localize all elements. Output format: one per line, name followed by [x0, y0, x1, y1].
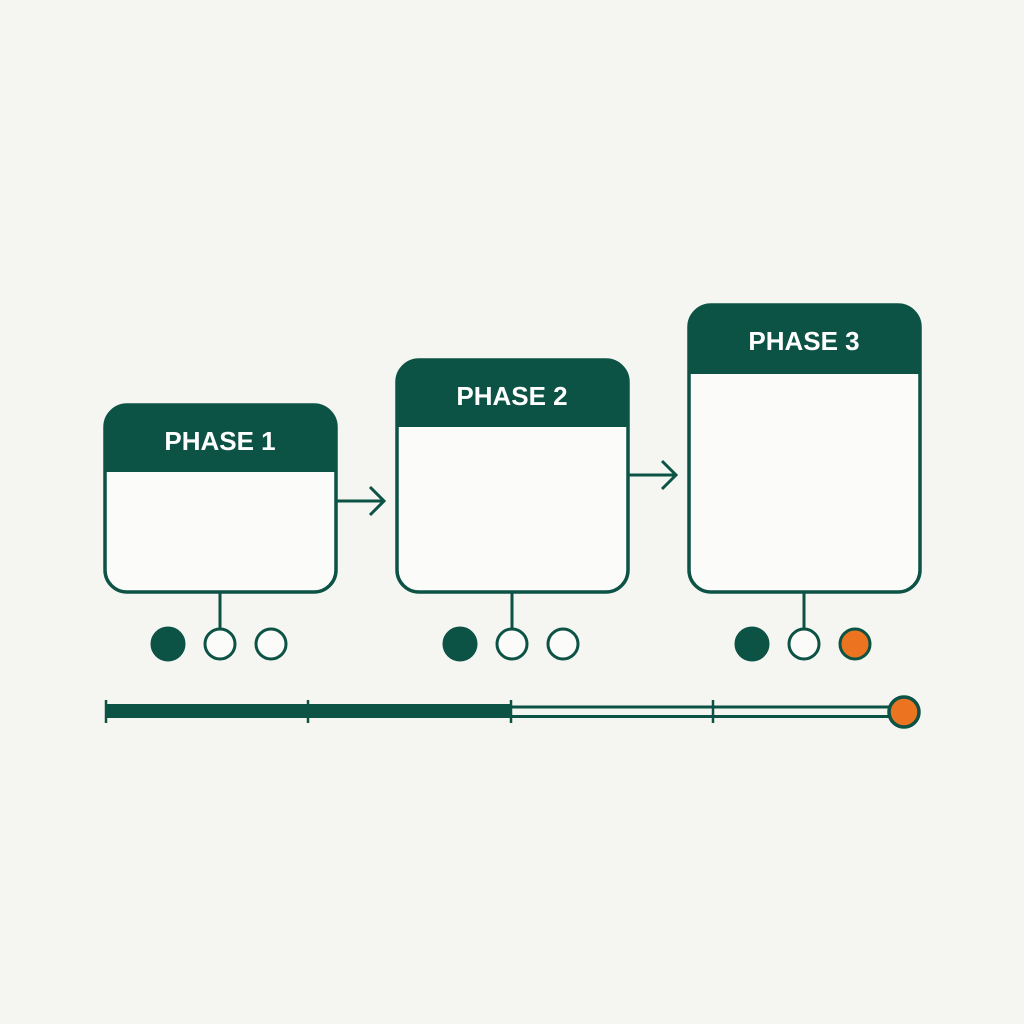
panel: phase 1: [105, 405, 336, 592]
heading: phase 3: PHASE 3: [748, 326, 860, 356]
connectors and dots: phase 2: [444, 592, 578, 660]
panel: phase 2: [397, 360, 628, 592]
icon: end marker: [889, 697, 919, 727]
heading: phase 2: PHASE 2: [456, 381, 568, 411]
connectors and dots: phase 1: [152, 592, 286, 660]
arrow: phase 1 to 2: [337, 487, 384, 515]
panel: phase 3: [689, 305, 920, 592]
connectors and dots: phase 3: [736, 592, 870, 660]
arrow: phase 2 to 3: [629, 461, 676, 489]
heading: phase 1: PHASE 1: [164, 426, 276, 456]
timeline progress bar: [106, 697, 919, 727]
